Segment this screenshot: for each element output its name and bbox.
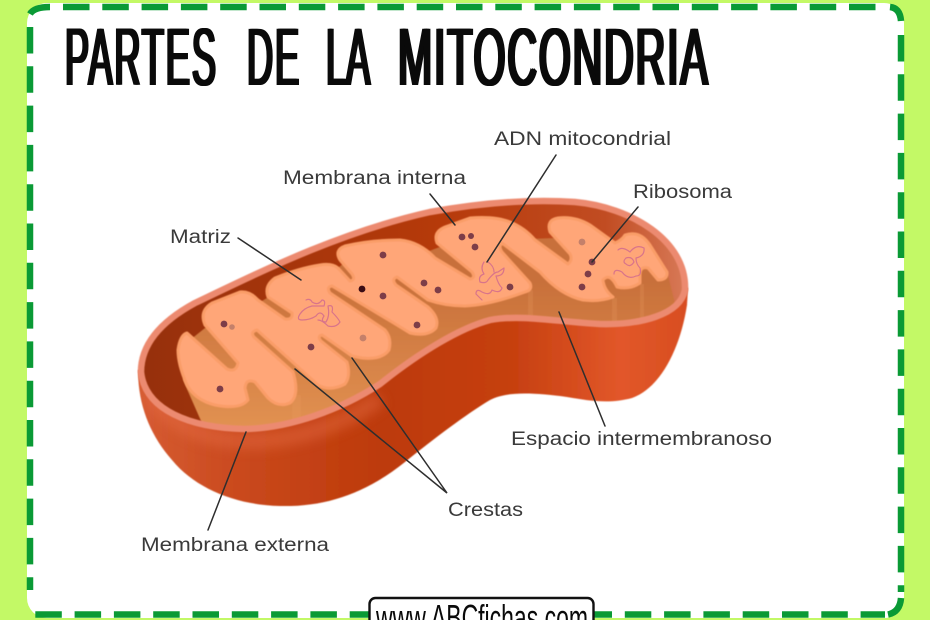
- label: Ribosoma: [592, 182, 732, 262]
- label: ADN mitocondrial: ADN mitocondrial: [494, 129, 671, 150]
- label: Matriz: [170, 227, 301, 280]
- light shading under the front rim: [150, 395, 380, 441]
- label: Ribosoma: Ribosoma: [633, 182, 732, 203]
- title: [65, 12, 710, 103]
- label: Membrana externa: Membrana externa: [141, 535, 330, 556]
- title: DE: [247, 12, 301, 103]
- cristae side walls: [183, 238, 682, 445]
- outer membrane body: [138, 240, 688, 506]
- mitochondrion diagram: [130, 190, 700, 506]
- mitochondrial DNA loops: [298, 247, 644, 326]
- title: PARTES: [65, 12, 218, 103]
- website badge: [370, 597, 594, 620]
- label: Matriz: Matriz: [170, 227, 231, 248]
- dark intermembrane interior: [144, 203, 682, 421]
- ribosome dots: [217, 233, 595, 392]
- pale membrane rim: [141, 201, 685, 429]
- label: Espacio intermembranoso: [511, 312, 772, 450]
- crista wall creases: [529, 284, 644, 310]
- label: Espacio intermembranoso: Espacio intermembranoso: [511, 429, 772, 450]
- title: MITOCONDRIA: [398, 12, 710, 103]
- label: ADN mitocondrial: [487, 129, 671, 262]
- crista folds top face: [178, 218, 667, 407]
- label: Membrana interna: [283, 168, 466, 225]
- label: Membrana externa: [141, 432, 330, 556]
- inner space and folded cristae: [144, 203, 682, 426]
- label: Crestas: Crestas: [448, 500, 523, 521]
- label: Membrana interna: Membrana interna: [283, 168, 466, 189]
- label: Crestas: [295, 358, 523, 521]
- title: LA: [326, 12, 370, 103]
